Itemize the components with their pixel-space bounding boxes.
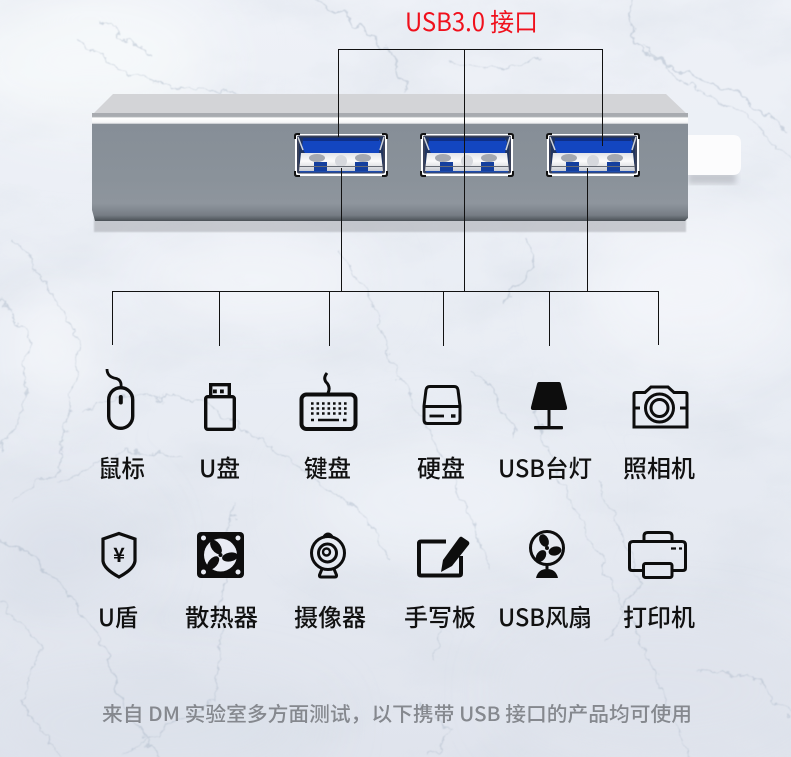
icon: USB flash drive xyxy=(206,385,234,429)
icon: drawing tablet xyxy=(419,537,469,576)
title: USB3.0 接口 xyxy=(405,3,538,39)
icon: camera xyxy=(634,387,687,427)
label: camera: 照相机 xyxy=(623,449,695,484)
USB hub product xyxy=(92,94,741,232)
icon: USB lamp xyxy=(531,382,567,429)
footer note: 来自 DM 实验室多方面测试，以下携带 USB 接口的产品均可使用 xyxy=(102,698,692,727)
label: printer: 打印机 xyxy=(623,598,695,633)
label: webcam: 摄像器 xyxy=(294,598,366,633)
icon: mouse xyxy=(107,369,133,428)
hub top face xyxy=(92,94,688,117)
hub front face xyxy=(92,124,688,221)
icon: printer xyxy=(630,532,686,578)
label: mouse: 鼠标 xyxy=(98,449,145,484)
connector lines xyxy=(112,50,658,346)
icon: webcam xyxy=(312,534,344,577)
label: keyboard: 键盘 xyxy=(304,449,351,484)
label: USB fan: USB风扇 xyxy=(498,598,592,633)
label: hard drive: 硬盘 xyxy=(417,449,465,484)
label: USB flash drive: U盘 xyxy=(199,449,240,484)
label: drawing tablet: 手写板 xyxy=(404,598,476,633)
icon: security key shield xyxy=(103,534,135,577)
hub highlight edge xyxy=(92,113,688,125)
plug shadow and USB plug xyxy=(688,135,741,184)
label: security key: U盾 xyxy=(98,598,138,633)
icon: security key shield: ¥ xyxy=(113,539,125,568)
port 3 xyxy=(547,134,639,176)
port 1 xyxy=(295,134,387,176)
icon: keyboard xyxy=(302,373,356,429)
hub shadow xyxy=(94,218,686,232)
port 2 xyxy=(421,134,513,176)
icon: hard drive xyxy=(424,386,460,424)
icon: cooling fan xyxy=(197,532,244,578)
label: USB lamp: USB台灯 xyxy=(498,449,592,484)
label: cooling fan: 散热器 xyxy=(185,598,258,633)
icon: USB fan xyxy=(530,532,564,578)
